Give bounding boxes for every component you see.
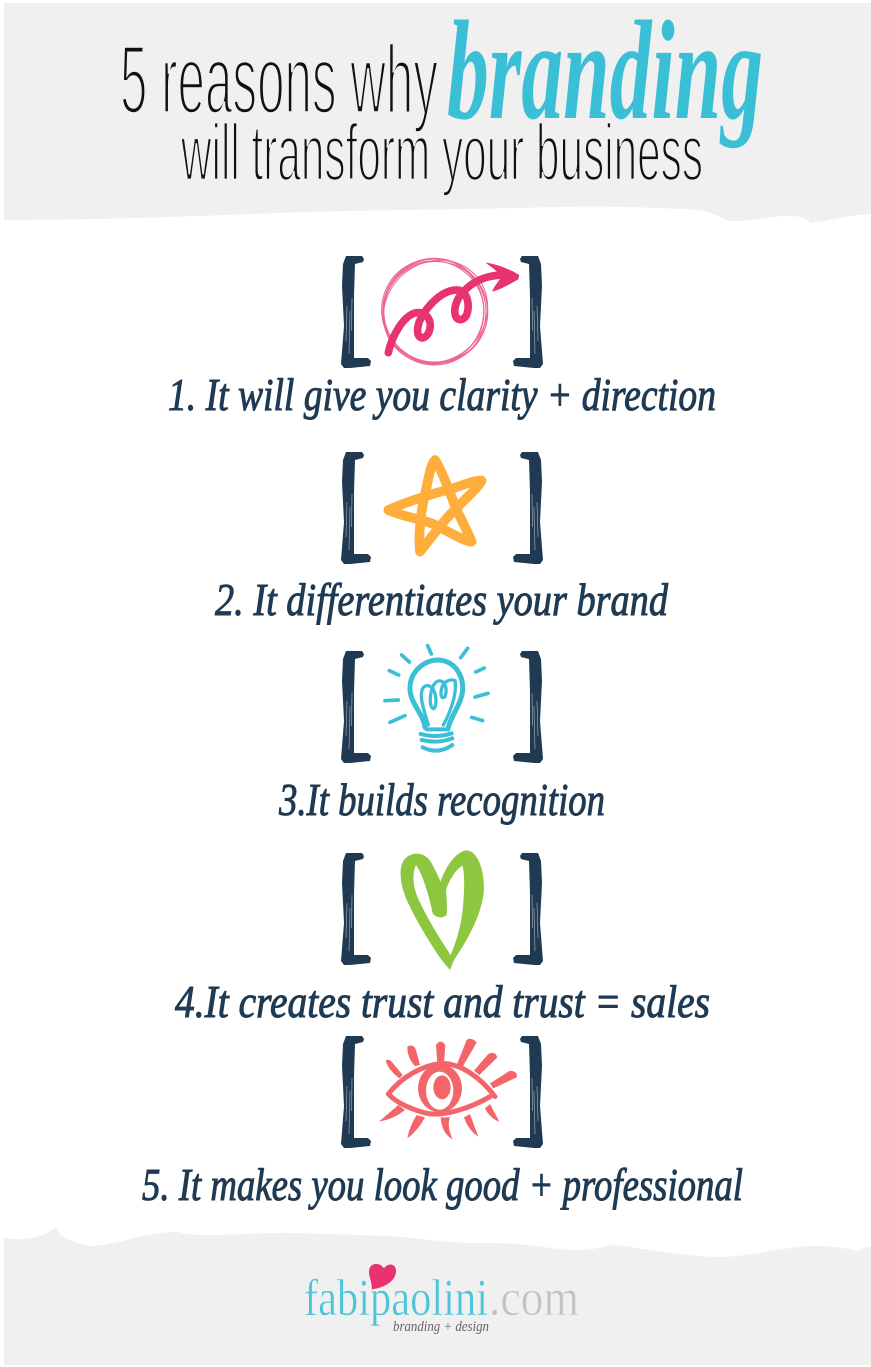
caption 3: 3.It builds recognition — [278, 774, 605, 825]
icon: brushed heart — [401, 850, 484, 970]
footer band — [4, 1227, 871, 1365]
brackets — [341, 853, 543, 965]
item 2: differentiates — [215, 452, 669, 625]
caption 1: 1. It will give you clarity + direction — [168, 369, 716, 420]
item 4: trust — [175, 850, 710, 1027]
icon: spiral arrow in circle — [362, 239, 519, 384]
icon: hand-drawn star — [388, 460, 482, 552]
icon: eye with lashes — [379, 1039, 517, 1139]
caption 4: 4.It creates trust and trust = sales — [175, 976, 710, 1027]
logo domain: .com — [489, 1270, 579, 1327]
item 5: looking good — [142, 1036, 743, 1210]
brackets — [341, 256, 543, 368]
logo name: fabipaolini — [304, 1270, 488, 1327]
logo tagline: branding + design — [393, 1319, 489, 1335]
title line 1: 5 reasons why — [120, 25, 438, 134]
logo — [304, 1264, 579, 1335]
icon: light bulb — [385, 646, 488, 751]
item 1: clarity and direction — [168, 239, 716, 420]
brackets — [341, 651, 543, 763]
brackets — [341, 452, 543, 564]
logo heart — [369, 1264, 396, 1289]
item 3: recognition — [278, 646, 605, 825]
header band — [4, 3, 871, 223]
brackets — [341, 1036, 543, 1148]
caption 2: 2. It differentiates your brand — [215, 574, 669, 625]
title — [120, 0, 763, 197]
